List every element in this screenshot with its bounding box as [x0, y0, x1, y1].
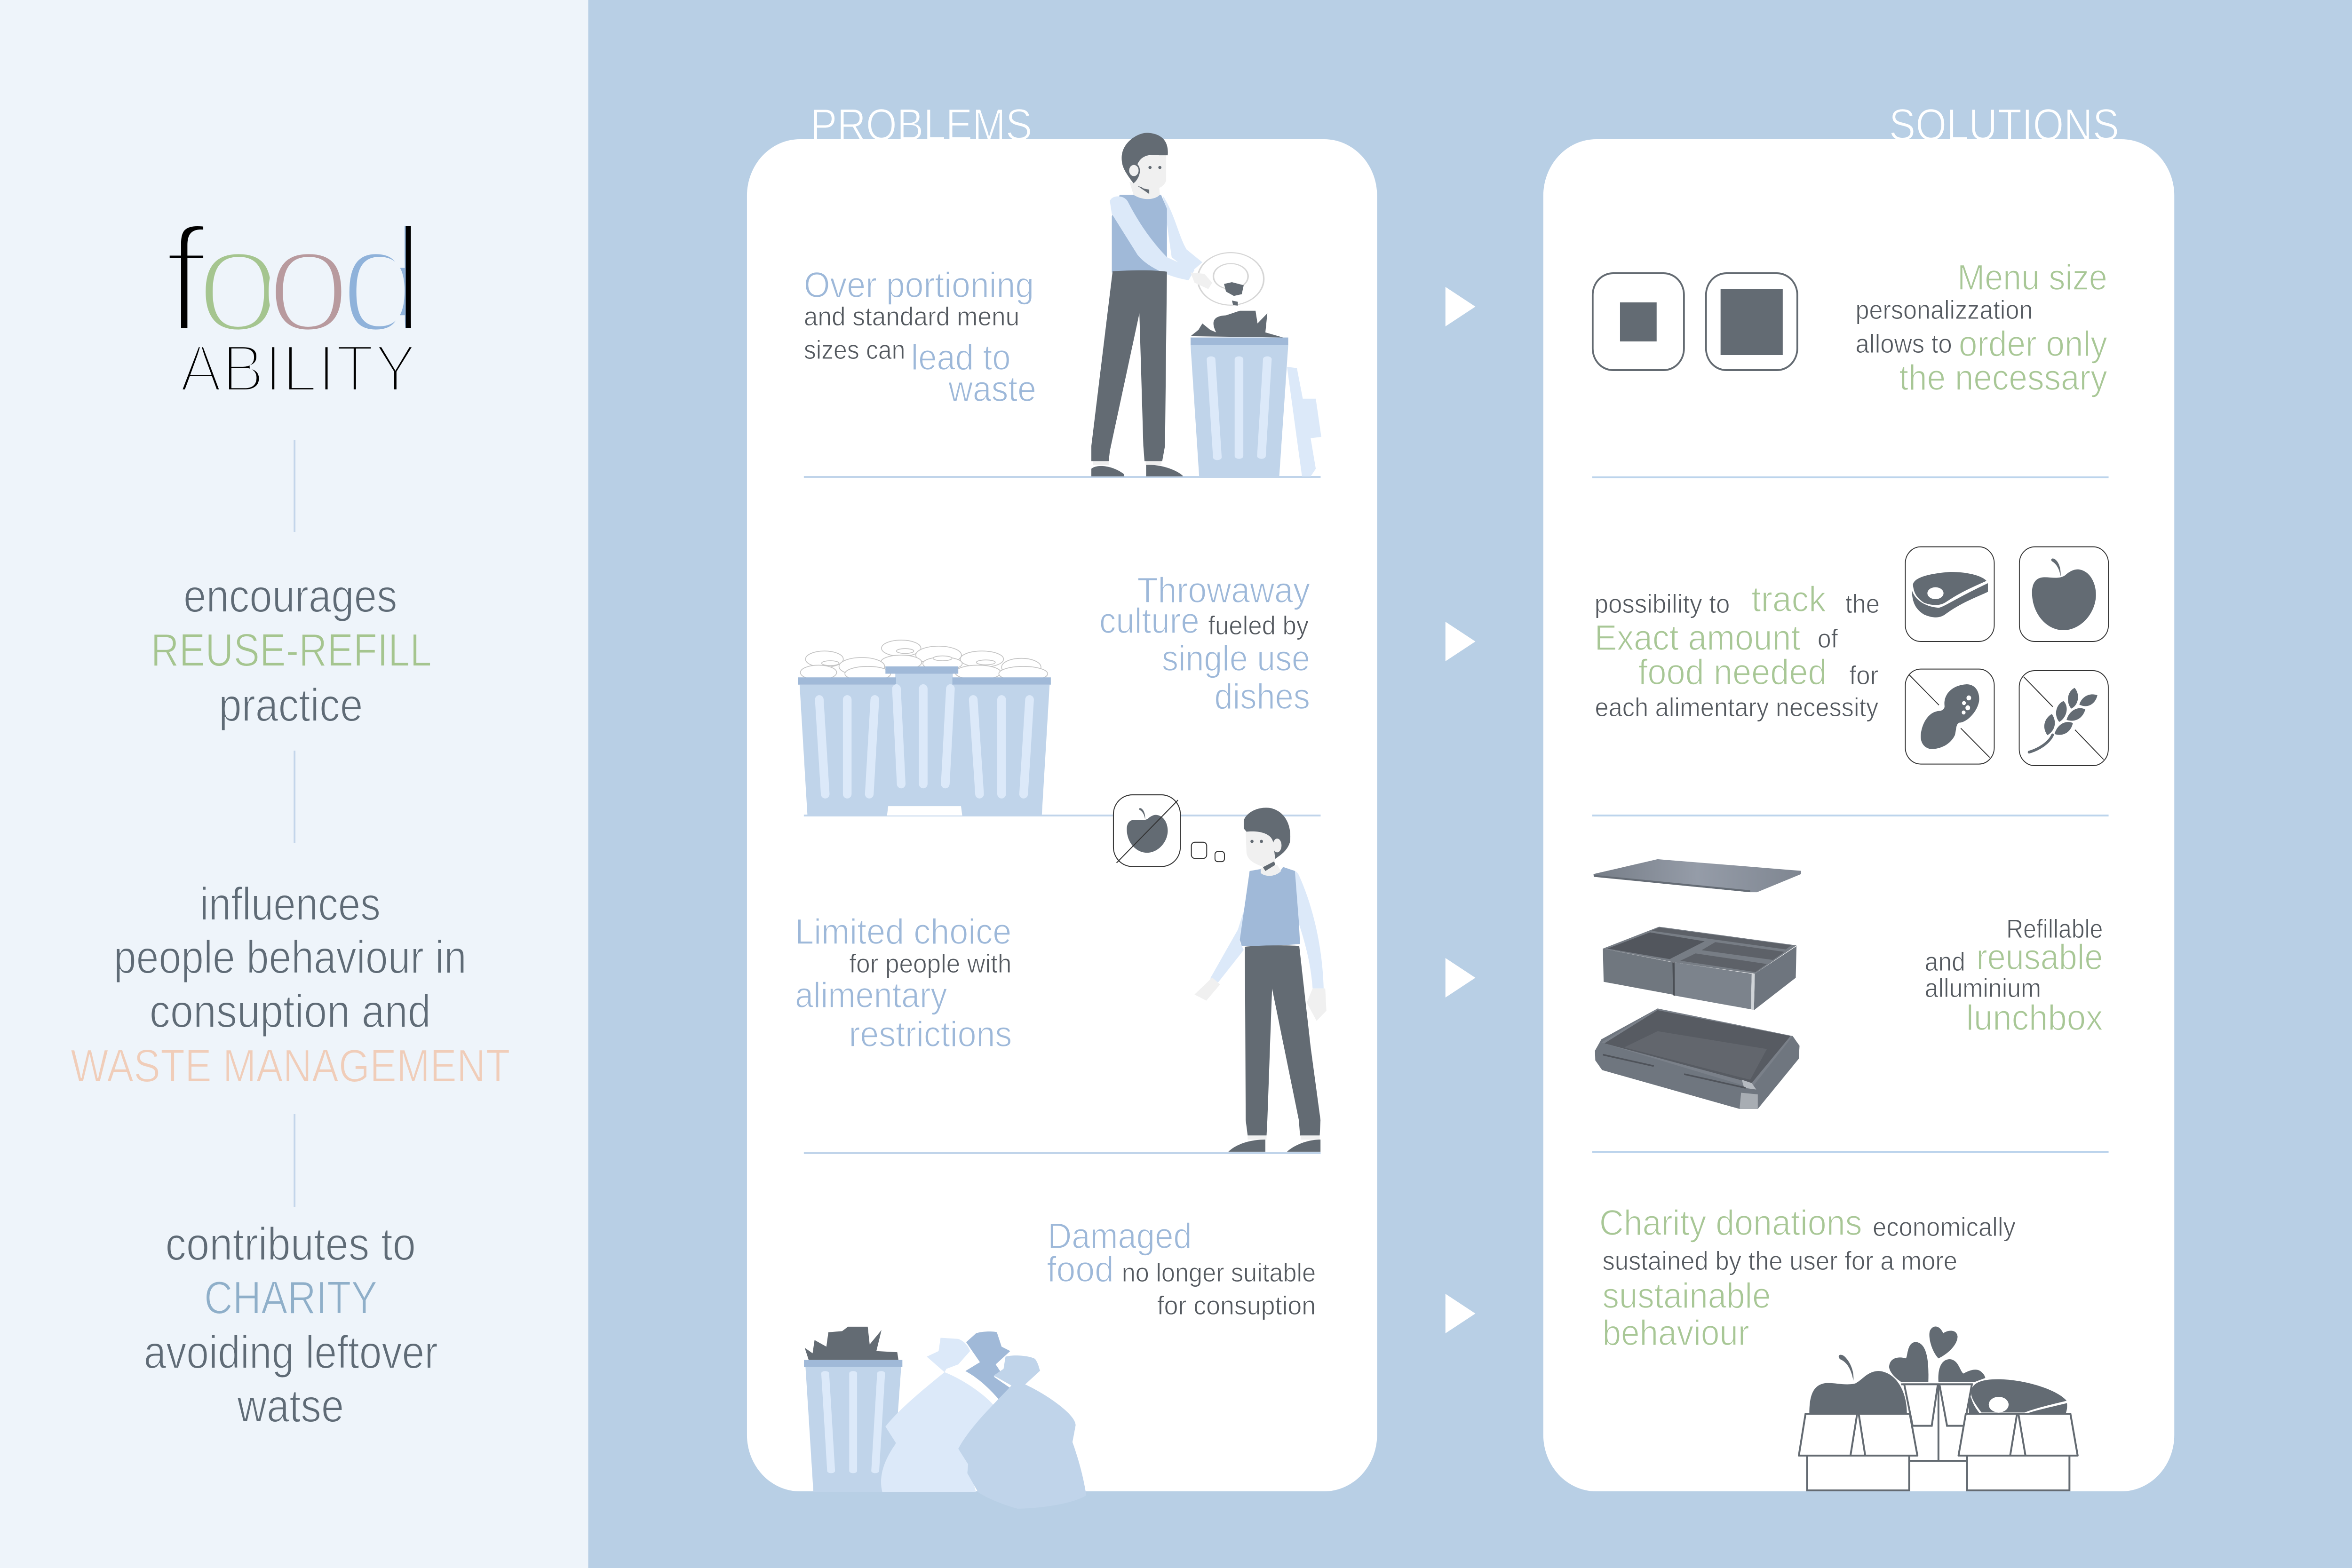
illustration: bins full of disposable dishes [798, 640, 1327, 1152]
text: throwaway culture: single use [1162, 638, 1310, 679]
left box [1799, 1414, 1917, 1490]
connector line 3 [294, 1114, 295, 1207]
text: encourages reuse-refill practice: encourages [183, 570, 397, 622]
connector line 1 [294, 440, 295, 532]
logo word: food: o [196, 195, 281, 364]
text: limited choice [795, 911, 1012, 1054]
lunchbox base tray [1595, 1008, 1800, 1109]
text: damaged food: no longer suitable [1122, 1258, 1316, 1287]
text: track exact amount [1595, 579, 1880, 722]
text: refillable reusable lunchbox: Refillable [2006, 914, 2103, 943]
logo word: food: d [339, 195, 425, 364]
icon: meat [1905, 547, 1994, 641]
text: track exact amount: Exact amount [1595, 618, 1800, 658]
text: damaged food: for consuption [1157, 1291, 1316, 1320]
falling food [1224, 282, 1244, 306]
text: encourages reuse-refill practice: practice [219, 680, 363, 731]
text: damaged food [1047, 1216, 1316, 1320]
text: refillable reusable lunchbox: reusable [1976, 937, 2103, 977]
garbage heap [1191, 311, 1283, 338]
text: charity donations: sustainable [1602, 1275, 1771, 1316]
text: track exact amount: possibility to [1595, 589, 1730, 618]
text: track exact amount: each alimentary necessity [1595, 692, 1879, 722]
problem divider lines [804, 476, 1320, 1154]
bin [1191, 338, 1288, 478]
text: track exact amount: track [1751, 579, 1826, 619]
bin lid [1287, 367, 1321, 476]
arrow 4 [1446, 1294, 1475, 1333]
text: refillable reusable lunchbox: lunchbox [1966, 998, 2103, 1038]
arrow 3 [1446, 958, 1475, 998]
text: charity donations: behaviour [1602, 1313, 1749, 1353]
back arm [1163, 196, 1202, 272]
text: track exact amount: for [1849, 660, 1878, 690]
text: influences behaviour and waste management: WASTE MANAGEMENT [71, 1040, 510, 1092]
text: charity donations: Charity donations [1599, 1203, 1862, 1243]
text: over portioning [804, 265, 1036, 409]
text: limited choice: alimentary [795, 975, 947, 1015]
text: over portioning: lead to [911, 337, 1010, 378]
text: encourages reuse-refill practice: REUSE-REFILL [151, 625, 432, 676]
text: refillable reusable lunchbox: and [1925, 947, 1965, 976]
logo word: ABILITY: ABILITY [180, 331, 416, 406]
head [1122, 133, 1168, 199]
bin [804, 1360, 902, 1492]
text: influences behaviour and waste management [71, 879, 510, 1092]
icon: apple [2019, 547, 2108, 641]
disposable plates [801, 640, 1048, 681]
logo: food ABILITY [164, 195, 425, 406]
text: throwaway culture: fueled by [1208, 610, 1309, 640]
hand [1191, 272, 1212, 289]
sweater [1112, 195, 1167, 272]
heading: solutions: SOLUTIONS [1889, 99, 2119, 150]
icon: small and large portions [1593, 273, 1797, 370]
text: refillable reusable lunchbox [1925, 914, 2103, 1038]
illustration: bin and rubbish bags [804, 1327, 1086, 1509]
hearts [1889, 1327, 1985, 1382]
right box [1959, 1414, 2078, 1490]
text: contributes to charity: CHARITY [204, 1272, 377, 1324]
panel: problems card [747, 139, 1377, 1491]
text: throwaway culture [1099, 570, 1310, 717]
text: damaged food: food [1047, 1249, 1114, 1290]
text: encourages reuse-refill practice [151, 570, 432, 731]
plate [1198, 253, 1264, 305]
apple [1809, 1355, 1907, 1413]
text: menu size: the necessary [1899, 357, 2107, 398]
text: menu size: allows to [1856, 329, 1952, 358]
text: throwaway culture: Throwaway [1137, 570, 1310, 610]
illustration: aluminium lunchbox [1593, 859, 1801, 1109]
heading: problems: PROBLEMS [810, 99, 1032, 150]
text: menu size: personalizzation [1856, 295, 2033, 325]
back box [1901, 1384, 1972, 1461]
text: charity donations: economically [1873, 1212, 2016, 1242]
meat [1969, 1379, 2067, 1414]
text: over portioning: sizes can [804, 335, 905, 364]
icon: apple [1127, 808, 1168, 853]
icon: no wheat [2019, 671, 2108, 766]
cuffs and shoes [1091, 461, 1183, 476]
text: charity donations [1599, 1203, 2016, 1353]
text: menu size [1856, 257, 2107, 398]
text: over portioning: and standard menu [804, 301, 1019, 331]
thought bubble: no apple [1113, 795, 1224, 866]
text: limited choice: restrictions [849, 1014, 1012, 1054]
rubbish bag: front [958, 1355, 1086, 1509]
text: contributes to charity: watse [237, 1380, 344, 1432]
rubbish bag: left [881, 1338, 1001, 1492]
connector line 2 [294, 751, 295, 843]
solution divider lines [1592, 476, 2109, 1153]
illustration: man throwing food in bin [1091, 133, 1321, 478]
text: charity donations: sustained by the user for a more [1602, 1246, 1957, 1275]
left sidebar panel [0, 0, 588, 1568]
text: track exact amount: food needed [1638, 652, 1827, 692]
three bins [798, 666, 1051, 816]
text: contributes to charity [144, 1219, 438, 1432]
icons: alimentary needs [1905, 547, 2108, 766]
arrow 2 [1446, 622, 1475, 661]
text: damaged food: Damaged [1048, 1216, 1192, 1256]
text: contributes to charity: avoiding leftover [144, 1327, 438, 1378]
text: throwaway culture: dishes [1215, 676, 1310, 717]
text: track exact amount: of [1818, 624, 1838, 653]
text: refillable reusable lunchbox: alluminium [1925, 973, 2041, 1003]
trousers [1091, 270, 1167, 461]
text: limited choice: Limited choice [795, 911, 1011, 952]
logo word: food: f [164, 195, 207, 364]
front arm [1110, 196, 1194, 280]
text: menu size: order only [1959, 324, 2107, 364]
rubbish bag: back [965, 1331, 1011, 1401]
text: contributes to charity: contributes to [166, 1219, 416, 1270]
logo word: food: o [266, 195, 351, 364]
text: influences behaviour and waste management: consuption and [150, 986, 431, 1037]
lunchbox compartments [1603, 927, 1796, 1010]
text: throwaway culture: culture [1099, 601, 1200, 641]
text: over portioning: Over portioning [804, 265, 1034, 305]
lunchbox lid [1593, 859, 1801, 892]
illustration: donation boxes with food and hearts [1799, 1327, 2078, 1490]
arrow 1 [1446, 287, 1475, 326]
man thinking [1194, 808, 1327, 1152]
panel: solutions card [1543, 139, 2174, 1491]
text: limited choice: for people with [849, 949, 1011, 978]
text: menu size: Menu size [1957, 257, 2107, 298]
garbage heap [805, 1327, 898, 1360]
icon: no peanut [1905, 669, 1994, 764]
text: influences behaviour and waste management: people behaviour in [114, 932, 467, 983]
text: influences behaviour and waste management: influences [200, 879, 381, 930]
text: over portioning: waste [948, 369, 1036, 409]
text: track exact amount: the [1845, 589, 1880, 618]
